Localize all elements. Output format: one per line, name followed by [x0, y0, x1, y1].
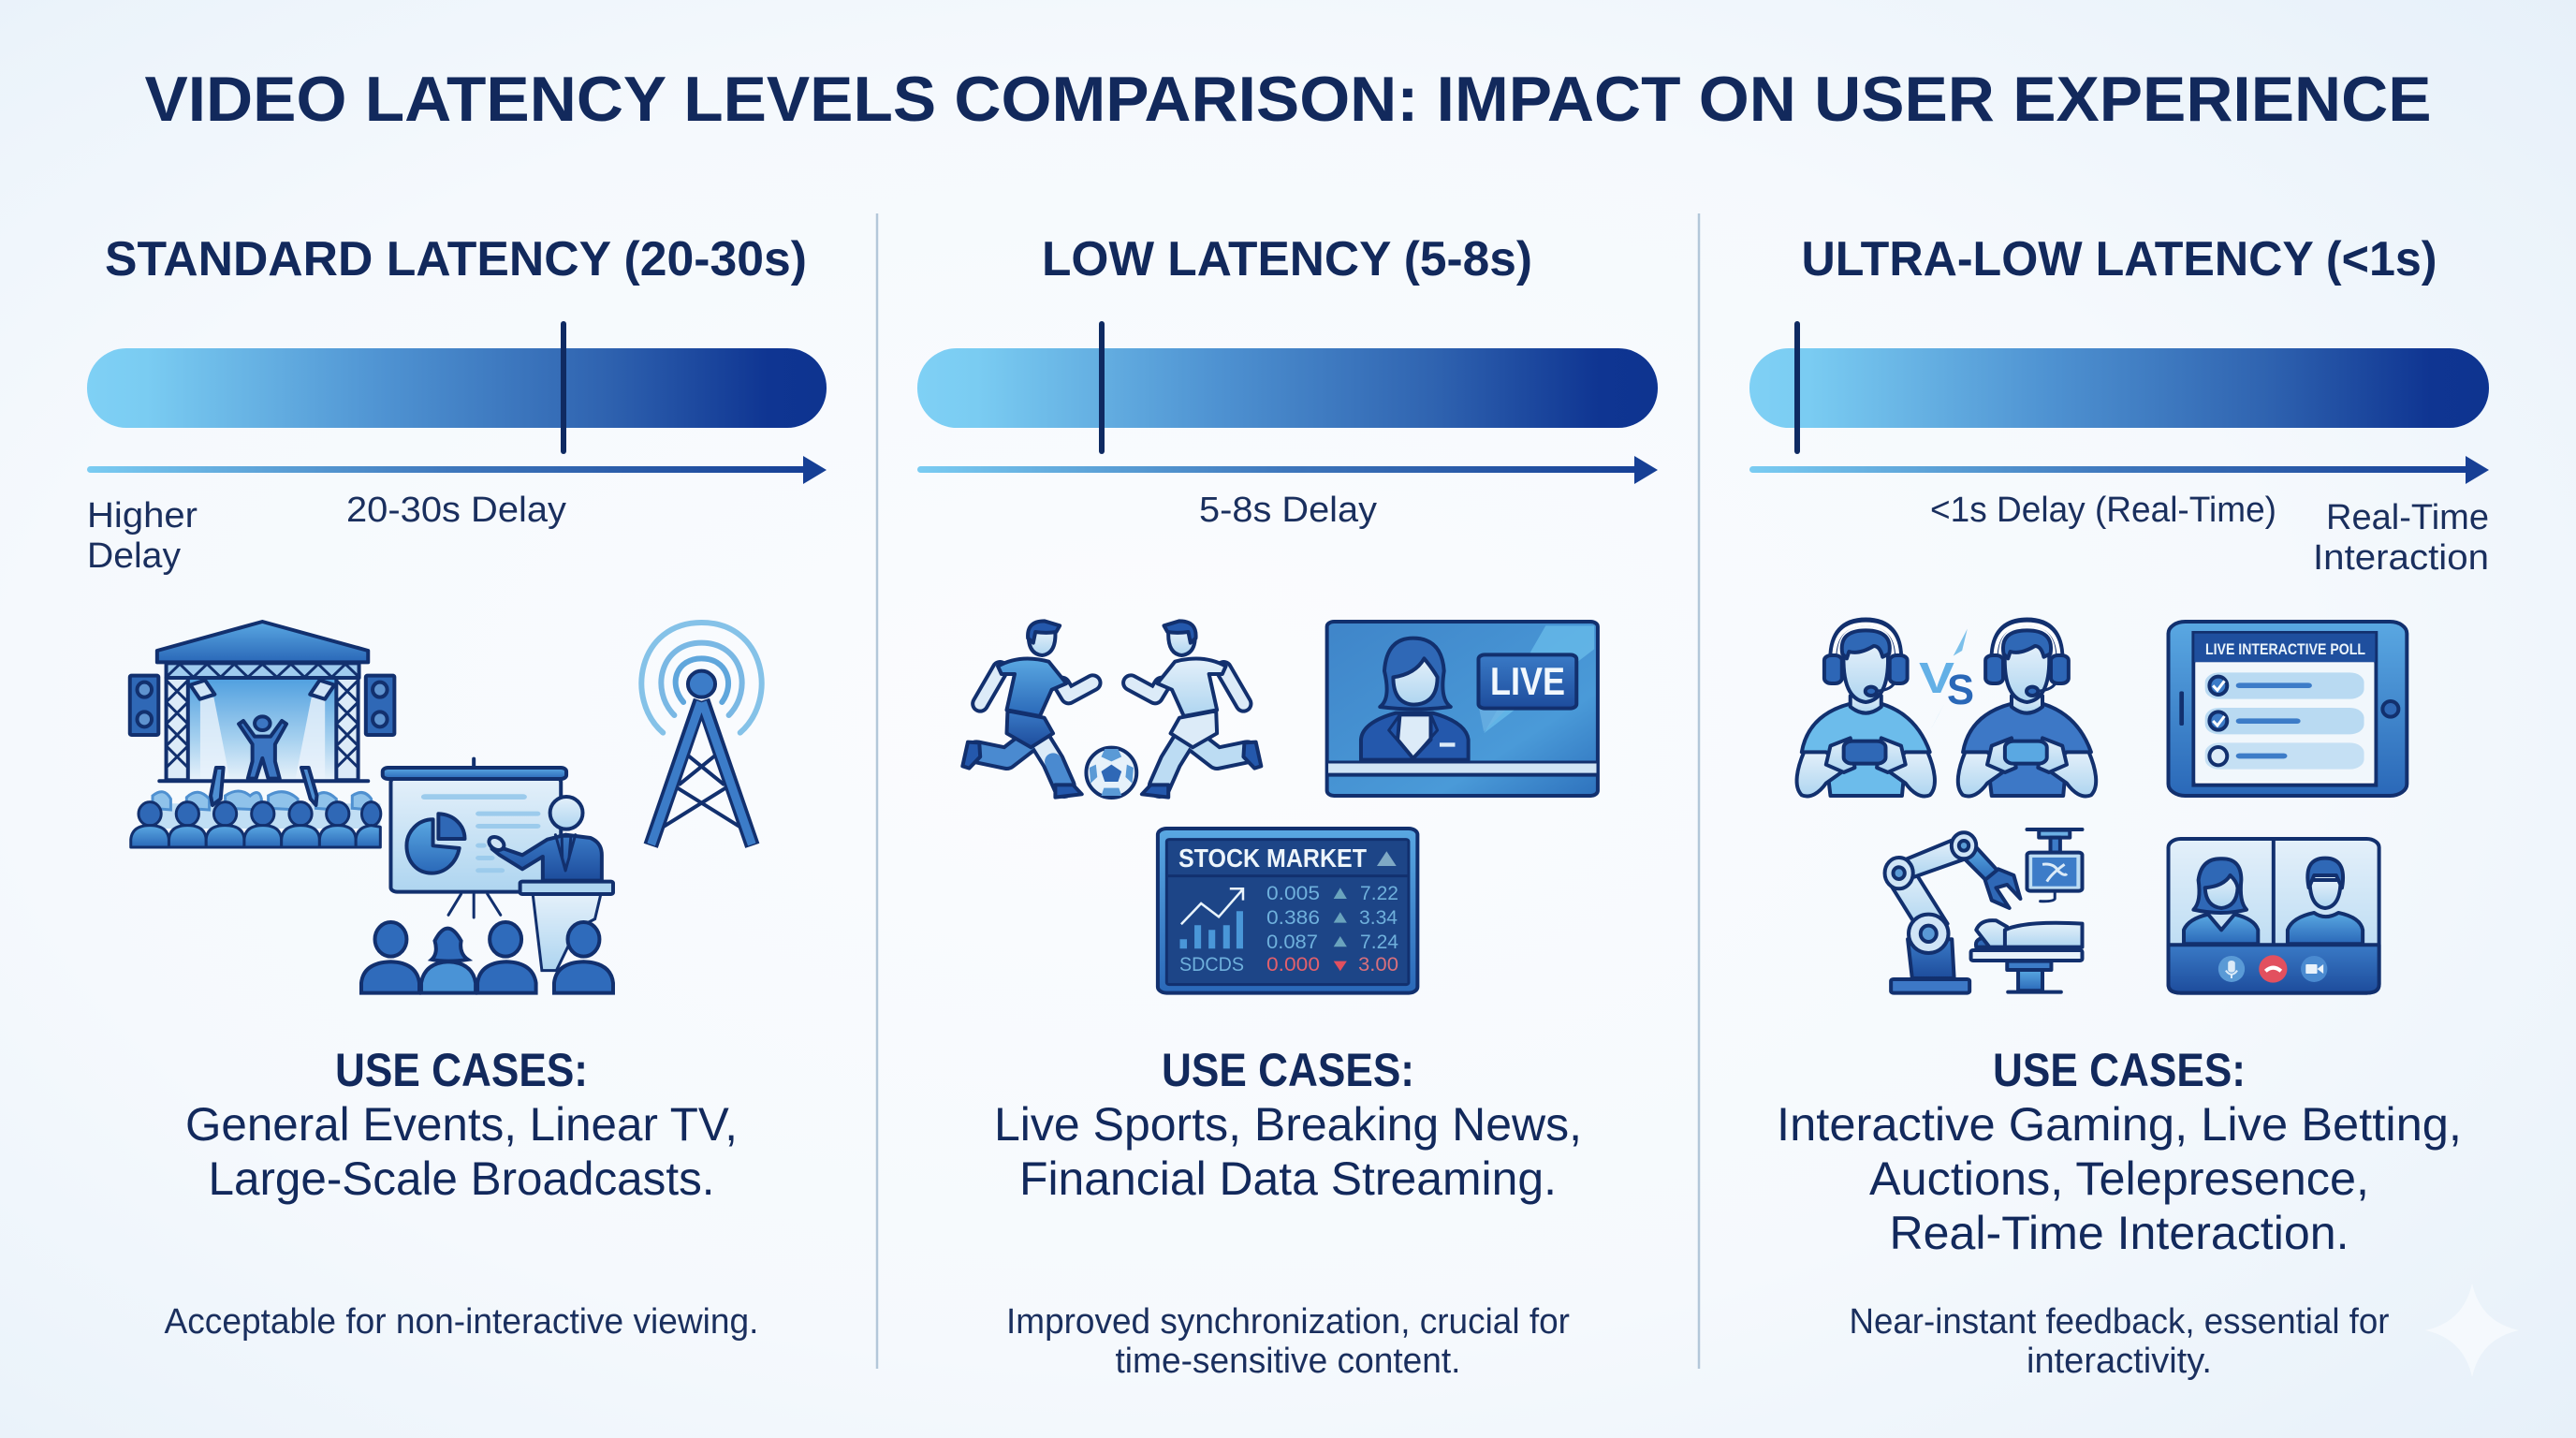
label: higher delay: Higher [87, 496, 198, 536]
note: low [1006, 1302, 1570, 1381]
note: ultra-low: interactivity. [2027, 1342, 2212, 1381]
heading: ultra-low latency: ULTRA-LOW LATENCY (<1s) [1801, 232, 2437, 286]
label: 20-30s delay: 20-30s Delay [346, 491, 566, 530]
icon: stock market board [1158, 829, 1417, 993]
use cases: standard: General Events, Linear TV, [185, 1098, 738, 1151]
use cases: standard: USE CASES: [335, 1044, 588, 1096]
use cases: standard: Large-Scale Broadcasts. [208, 1152, 715, 1205]
use cases: low: Financial Data Streaming. [1019, 1152, 1557, 1205]
icon: stock market board: STOCK MARKET [1178, 844, 1367, 873]
icon: broadcast tower [641, 623, 762, 845]
icon: stock market board: 7.22 [1360, 883, 1398, 904]
delay gauge: ultra-low [1749, 321, 2489, 484]
note: low: time-sensitive content. [1116, 1342, 1460, 1381]
note: ultra-low: Near-instant feedback, essential for [1850, 1302, 2390, 1342]
sparkle watermark [2425, 1284, 2519, 1377]
icon: live poll tablet [2169, 622, 2407, 796]
icon: presenter with audience [361, 759, 613, 993]
use cases: ultra-low: Real-Time Interaction. [1889, 1207, 2349, 1259]
icon: gamers versus: S [1947, 666, 1974, 713]
note: ultra-low [1850, 1302, 2390, 1381]
label: under 1s delay: <1s Delay (Real-Time) [1930, 491, 2276, 530]
soccer ball [1086, 748, 1136, 798]
use cases: low [994, 1044, 1582, 1205]
use cases: low: USE CASES: [1162, 1044, 1414, 1096]
icon: stock market board: 0.000 [1266, 954, 1320, 976]
icon: video call [2169, 839, 2379, 993]
use cases: ultra-low [1777, 1044, 2462, 1259]
use cases: low: Live Sports, Breaking News, [994, 1098, 1582, 1151]
label: real-time interaction: Real-Time [2326, 498, 2489, 537]
heading: low latency: LOW LATENCY (5-8s) [1042, 232, 1532, 286]
use cases: ultra-low: Interactive Gaming, Live Betting, [1777, 1098, 2462, 1151]
delay gauge: low [917, 321, 1658, 484]
icon: stock market board: 7.24 [1360, 932, 1398, 953]
icon: robotic surgery [1885, 829, 2082, 993]
icon: soccer players [962, 621, 1261, 798]
panel: standard latency [87, 232, 827, 1342]
icon: live news screen: LIVE [1490, 659, 1565, 703]
use cases: ultra-low: USE CASES: [1993, 1044, 2246, 1096]
icon: stock market board: 0.005 [1266, 883, 1320, 904]
divider left [876, 213, 878, 1369]
icon: stock market board: SDCDS [1179, 954, 1244, 976]
divider right [1698, 213, 1700, 1369]
note: low: Improved synchronization, crucial for [1006, 1302, 1570, 1342]
icon: stock market board: 3.00 [1358, 954, 1398, 976]
icon: stock market board: 3.34 [1359, 907, 1398, 929]
delay gauge: standard [87, 321, 827, 484]
use cases: standard [185, 1044, 738, 1205]
label: 5-8s delay: 5-8s Delay [1199, 491, 1377, 530]
label: higher delay: Delay [87, 536, 181, 576]
icon: stock market board: 0.386 [1266, 907, 1320, 929]
note: standard: Acceptable for non-interactive viewing. [165, 1302, 758, 1342]
use cases: ultra-low: Auctions, Telepresence, [1869, 1152, 2369, 1205]
left player [962, 621, 1093, 798]
icon: live poll tablet: LIVE INTERACTIVE POLL [2205, 640, 2365, 658]
heading: standard latency: STANDARD LATENCY (20-30s) [105, 232, 807, 286]
right player [1131, 621, 1261, 798]
label: real-time interaction: Interaction [2313, 538, 2489, 578]
icon: concert stage [130, 622, 394, 847]
icon: gamers versus [1797, 622, 2096, 796]
panel: low latency [917, 232, 1658, 1381]
icon: stock market board: 0.087 [1266, 932, 1318, 953]
icon: gamers versus: V [1919, 653, 1954, 702]
icon: live news screen [1327, 622, 1598, 796]
title: VIDEO LATENCY LEVELS COMPARISON: IMPACT ON USER EXPERIENCE [144, 64, 2432, 135]
panel: ultra-low latency [1749, 232, 2489, 1381]
